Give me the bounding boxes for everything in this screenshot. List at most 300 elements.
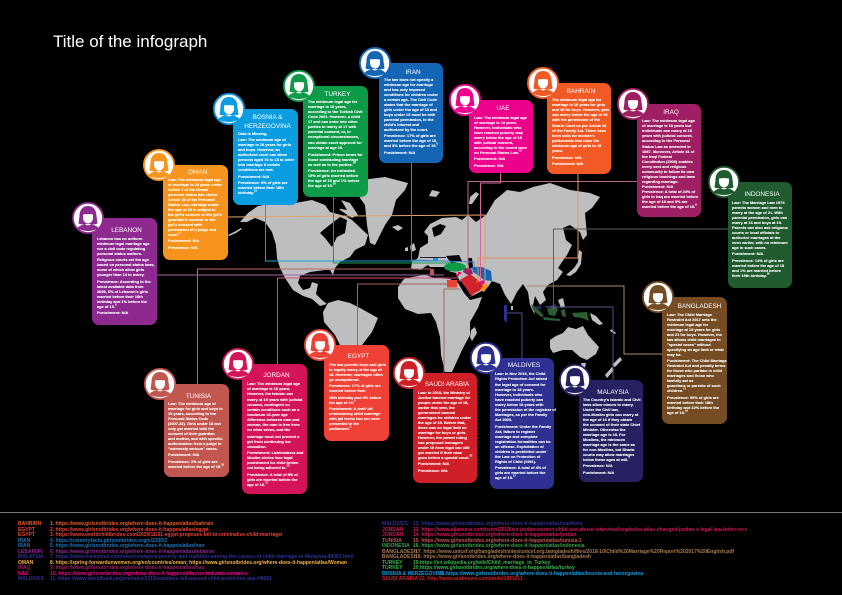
text block: 18 years, according to the bbox=[168, 410, 216, 416]
footnotes: left column: MALDIVES bbox=[18, 576, 44, 582]
text block: birthday and 1% before the bbox=[97, 299, 147, 304]
text block: specifying an age limit or what bbox=[667, 346, 724, 352]
text block: of marriage is 18 years. bbox=[247, 386, 290, 390]
footnotes: left column: BAHRAIN bbox=[18, 521, 41, 527]
text block: Act 2000. bbox=[495, 417, 512, 422]
text block: every sect and religious bbox=[642, 164, 686, 169]
footnotes: right column: 17. https://www.unicef.org/bangladesh/sites/unicef.org.bangladesh/files/2018-10/Child%20Marriage%20Report%202017%20English.pdf bbox=[415, 549, 734, 555]
text block: for those who partake in child bbox=[667, 368, 722, 373]
text block bbox=[474, 114, 527, 168]
text block: latest available data from bbox=[97, 284, 144, 289]
line: Tunisia bbox=[198, 269, 431, 384]
text block: Prevalence: A total of 24% of bbox=[642, 189, 695, 194]
panel: Tunisia bbox=[164, 384, 229, 477]
text block: Punishment: The Child Marriage bbox=[667, 358, 727, 363]
text block: minimum legal age for bbox=[667, 322, 708, 326]
text block: marriage and complete bbox=[495, 434, 538, 439]
text block: married before the age of 18 bbox=[732, 263, 784, 268]
text block: of marriage is 18 years. bbox=[474, 120, 517, 124]
text block: Punishment: N/A bbox=[384, 150, 415, 155]
text block: married before their 18th bbox=[97, 294, 143, 299]
text block: people under the age of 18, bbox=[418, 400, 468, 404]
text block: not being adhered to.13 bbox=[247, 465, 289, 470]
text block: the girl's consent or the girl's bbox=[168, 212, 222, 216]
text block: younger than 14 to marry. bbox=[97, 272, 144, 277]
footnotes: left column: 2. https://www.girlsnotbrides.org/where-does-it-happen/atlas/egypt bbox=[50, 527, 209, 533]
text block: exceptional circumstances, bbox=[308, 134, 359, 138]
text block: 18. However, marriages often bbox=[329, 372, 383, 376]
text block: marriages for children under bbox=[418, 414, 471, 420]
footnotes: left column: IRAN bbox=[18, 538, 30, 544]
text block: criminalizing child marriage bbox=[329, 411, 380, 416]
text block: according to the Turkish Civil bbox=[308, 108, 362, 114]
text block: age of 15.18 bbox=[667, 409, 688, 415]
text block: Act, failure to register bbox=[495, 429, 535, 434]
text block bbox=[384, 76, 438, 155]
text block: However, individuals who bbox=[474, 124, 521, 130]
country: Iran bbox=[472, 267, 492, 281]
text block: Justice banned marriage for bbox=[418, 394, 470, 400]
text block: parties to marry at 17 with bbox=[308, 124, 356, 128]
text block: Personal Status Code bbox=[168, 416, 208, 420]
text block: Law: In 2019, the Ministry of bbox=[418, 390, 470, 394]
text block: Punishment: N/A bbox=[583, 470, 614, 475]
panel: Bosnia and Herzegovina bbox=[233, 109, 298, 205]
text block: marriage to 18 years. bbox=[495, 387, 534, 392]
text block: earlier that year, the bbox=[418, 404, 455, 410]
country: Malaysia bbox=[536, 304, 556, 309]
text block: Punishment: N/A bbox=[168, 452, 199, 457]
text block: marriages and those who bbox=[667, 373, 714, 378]
country: Iraq bbox=[463, 268, 473, 275]
heading: HERZEGOVINA bbox=[244, 123, 291, 130]
text block: Constitution (2005) enables bbox=[642, 159, 693, 164]
text block: based on personal status laws, bbox=[97, 262, 155, 267]
text block: marriage age is the same as bbox=[583, 442, 635, 446]
line: Egypt bbox=[358, 284, 450, 345]
country: Bosnia bbox=[433, 258, 438, 261]
text block: the age of 15. Before that, bbox=[418, 420, 466, 424]
country: UAE bbox=[480, 280, 485, 285]
panel: Jordan bbox=[242, 364, 307, 494]
footnotes: right column: 21.https://www.girlsnotbrides.org/where-does-it-happen/atlas/bosnia-and-herzegovina bbox=[439, 571, 643, 577]
country: Saudi Arabia bbox=[460, 274, 485, 296]
text block: parental consent, or, in bbox=[308, 128, 351, 134]
text block: and 3% before the age of 15.5 bbox=[384, 143, 438, 148]
text block: the consent of their state Chief bbox=[583, 422, 640, 426]
text block: Article 10 of the Personal bbox=[168, 196, 215, 202]
panel: Iraq bbox=[637, 104, 701, 217]
text block: below these ages at will.7 bbox=[583, 456, 630, 462]
footnotes: right column: BOSNIA & HERZEGOVINA bbox=[382, 571, 444, 577]
icon: Iraq avatar bbox=[617, 88, 649, 120]
text block: However, the parent ruling bbox=[418, 434, 467, 440]
heading: LEBANON bbox=[111, 227, 142, 234]
text block: The minimum legal age for bbox=[552, 96, 601, 102]
text block: Prevalence: 4% of girls are bbox=[238, 180, 288, 185]
text block: Punishment: N/A bbox=[732, 251, 763, 256]
icon: Oman avatar bbox=[143, 149, 175, 181]
heading: IRAQ bbox=[663, 109, 679, 116]
text block: maximum 15-year age bbox=[247, 412, 288, 417]
text block: girls are married before the bbox=[247, 477, 297, 482]
text block: girls in Iraq are married before bbox=[642, 194, 698, 199]
text block: some of which allow girls bbox=[97, 267, 144, 272]
heading: BANGLADESH bbox=[678, 303, 721, 310]
text block: Restraint Act 2017 sets the bbox=[667, 316, 717, 322]
footnotes: right column: 14. https://www.girlsnotbrides.org/where-does-it-happen/atlas/jordan bbox=[413, 532, 576, 538]
text block: have reached puberty may bbox=[474, 130, 523, 134]
text block: Marriages, as per the Family bbox=[495, 412, 547, 417]
icon: Iran avatar bbox=[359, 47, 391, 79]
text block: can obtain court approval for bbox=[308, 140, 362, 145]
text block bbox=[583, 396, 641, 475]
text block: Prevalence: 17% of girls are bbox=[329, 383, 381, 388]
text block: Punishment: N/A bbox=[552, 161, 583, 166]
text block: Parents can also ask religious bbox=[732, 224, 788, 230]
text block: only get married with the bbox=[168, 426, 214, 430]
text block: personal status matters. bbox=[97, 250, 142, 256]
text block: authorized by the court. bbox=[384, 126, 428, 132]
text block: Rights Protection Act raised bbox=[495, 376, 547, 380]
heading: JORDAN bbox=[263, 372, 290, 379]
panel: Bangladesh bbox=[662, 297, 727, 424]
text block: an offense. Exploitation of bbox=[495, 444, 544, 449]
icon: Tunisia avatar bbox=[144, 368, 176, 400]
text block: and 21 for boys. However, the bbox=[667, 332, 722, 336]
text block: Status Law, marriage under bbox=[168, 202, 219, 206]
text block bbox=[308, 98, 363, 188]
heading: MALAYSIA bbox=[597, 389, 629, 396]
icon: Jordan avatar bbox=[222, 348, 254, 380]
heading: INDONESIA bbox=[744, 191, 780, 198]
text block: been calls for women's bbox=[552, 133, 595, 138]
text block: difference between man and bbox=[247, 417, 299, 422]
map: highlighted countries bbox=[420, 257, 589, 323]
title: Title of the infograph bbox=[53, 32, 207, 51]
text block: girls under the age of 13 and bbox=[384, 106, 437, 112]
text block: their 15th birthday.16 bbox=[732, 272, 770, 278]
footnotes: left column: 7. https://www.malaymail.com/news/malaysia/poverty-and-tradition-among-the-causes-of-child-marriage-in-Malaysia-48083.html bbox=[50, 554, 354, 560]
icon: UAE avatar bbox=[449, 84, 481, 116]
footnotes: left column: IRAQ bbox=[18, 565, 30, 571]
heading: BOSNIA & bbox=[253, 114, 282, 121]
text block: can marry below the age of 16 bbox=[552, 112, 608, 116]
footnotes: left column: LEBANON bbox=[18, 549, 43, 555]
text block: go unregistered. bbox=[329, 376, 359, 382]
text block: birthday.21 bbox=[238, 190, 257, 195]
text block: child's interest and bbox=[384, 122, 419, 126]
text block: guardians or parents of such bbox=[667, 383, 721, 388]
text block: The Country's Islamic and Civil bbox=[583, 396, 641, 402]
footnotes: right column: 19.https://en.wikipedia.org/wiki/Child_marriage_in_Turkey bbox=[413, 560, 550, 566]
footnotes: left column bbox=[18, 521, 354, 582]
text block: parental permission, in the bbox=[384, 116, 434, 122]
text block: Law: The minimum legal age bbox=[168, 176, 221, 182]
text block: The law permits boys and girls bbox=[329, 362, 386, 366]
heading: TURKEY bbox=[325, 91, 350, 98]
icon: Egypt avatar bbox=[304, 329, 336, 361]
footnotes: right column: BANGLADESH bbox=[382, 554, 417, 560]
footnotes: left column: 3. https://www.worldchildbrides.com/2020/11/31-egypt-proposes-bill-to-criminalize-child-marriage/ bbox=[50, 532, 282, 538]
footnotes: left column: OMAN bbox=[18, 560, 33, 566]
text block: community to follow its own bbox=[642, 169, 694, 174]
country: Oman bbox=[480, 283, 489, 292]
footnotes: right column: MALDIVES bbox=[382, 521, 408, 527]
footnotes: left column: 1. https://www.girlsnotbrides.org/where-does-it-happen/atlas/bahrain bbox=[50, 521, 213, 527]
text block: Punishment: Prison terms for bbox=[308, 152, 363, 157]
text block: Article 7 of the Omani bbox=[168, 186, 208, 192]
text block: non-Muslim girls can marry at bbox=[583, 412, 638, 416]
footnotes: left column: EGYPT bbox=[18, 527, 35, 533]
text block: the age of 18 and 1% before bbox=[308, 178, 359, 183]
text block: parliament.2 bbox=[329, 426, 351, 431]
text block: 15% of girls married before bbox=[308, 173, 358, 178]
text block bbox=[328, 362, 386, 431]
heading: TUNISIA bbox=[186, 393, 211, 400]
text block: personal status law. Under bbox=[168, 192, 217, 196]
text block: Rights of Child (1991). bbox=[495, 459, 536, 464]
text block: Prevalence: N/A bbox=[474, 163, 504, 168]
text block: punishment for child brides bbox=[247, 460, 298, 465]
text block: Punishment: Lawbreakers and bbox=[247, 450, 303, 455]
text block: with jail terms has not been bbox=[329, 416, 380, 421]
text block: have reached puberty can bbox=[495, 397, 543, 402]
text block: lawfully act as bbox=[667, 378, 693, 383]
text block: even earlier, with no minimum bbox=[732, 240, 788, 244]
text block bbox=[495, 370, 556, 480]
text block: there was no legal limit on bbox=[418, 424, 467, 430]
text block bbox=[642, 118, 698, 209]
line: Bangladesh bbox=[527, 286, 662, 354]
panel: Turkey bbox=[303, 86, 368, 197]
text block: court.8 bbox=[168, 231, 180, 236]
text block: authorized court can allow bbox=[238, 152, 287, 157]
text block: may be. bbox=[667, 352, 682, 356]
text block: minimum age for marriage bbox=[384, 82, 433, 86]
footnotes: left column: IRAN bbox=[18, 543, 30, 549]
text block: Prevalence: N/A bbox=[552, 155, 582, 160]
text block: those contracting marriage bbox=[308, 157, 358, 162]
country: Indonesia bbox=[531, 304, 589, 321]
text block: certain conditions such as a bbox=[247, 407, 299, 412]
text block: "extremely serious" cases. bbox=[168, 446, 218, 450]
text block: of marriage is 18 years under bbox=[168, 182, 222, 186]
footnotes: right column: BANGLADESH bbox=[382, 549, 417, 555]
text block: Prevalence: 17% of girls are bbox=[384, 133, 436, 138]
text block: conditions are met. bbox=[238, 167, 274, 172]
footnotes: left column: 4. https://countryfacts.girlsnotbrides.org/c/2330/2 bbox=[50, 538, 167, 544]
text block: consent of their guardian bbox=[168, 430, 215, 436]
footnotes: right column: 15. https://www.girlsnotbrides.org/where-does-it-happen/atlas/tunisia-2 bbox=[413, 538, 582, 544]
panel: Oman bbox=[163, 165, 228, 260]
icon: Turkey avatar bbox=[283, 70, 315, 102]
text block: boys under 15 must be with bbox=[384, 112, 435, 116]
footnotes: right column: 18. https://www.girlsnotbrides.org/where-does-it-happen/atlas/bangladesh bbox=[415, 554, 591, 560]
footnotes: left column: 5. https://www.girlsnotbrides.org/where-does-it-happen/atlas/iran bbox=[50, 543, 205, 549]
text block: parental permission, girls can bbox=[732, 214, 787, 220]
text block: Law: The minimum age of bbox=[168, 400, 216, 406]
text block: Punishment: N/A bbox=[168, 238, 199, 243]
text block: years. bbox=[552, 148, 563, 153]
text block: marry at 16 and boys at 19. bbox=[732, 220, 782, 224]
line: UAE bbox=[480, 173, 500, 280]
text block: courts may allow marriages bbox=[583, 452, 634, 456]
text block: the age of 15.20 bbox=[308, 183, 336, 188]
text block: marriage for boys or girls. bbox=[418, 430, 466, 434]
country: Maldives bbox=[504, 305, 507, 323]
text block: Law: The Child Marriage bbox=[667, 312, 712, 316]
text block: 1987. Moreover, Article 41 of bbox=[642, 149, 694, 154]
footnotes: right column: JORDAN bbox=[382, 527, 403, 533]
icon: Indonesia avatar bbox=[708, 166, 740, 198]
text block: girls are married before the bbox=[495, 470, 545, 475]
text block bbox=[667, 312, 727, 415]
text block: Under the Civil law, bbox=[583, 406, 619, 412]
country: Jordan and Lebanon bbox=[456, 272, 461, 276]
text block: with judicial consent, bbox=[474, 140, 513, 144]
text block: marry at 15 years with judicial bbox=[247, 397, 302, 402]
text block: guardian's consent or the bbox=[168, 216, 215, 222]
icon: Bahrain avatar bbox=[527, 67, 559, 99]
map: seas cut out bbox=[303, 198, 473, 297]
line: Oman bbox=[228, 215, 485, 286]
text block: according to the recent case bbox=[474, 144, 527, 150]
line: Turkey bbox=[334, 197, 450, 263]
text block: Law: In Nov 2019, the Child bbox=[495, 370, 545, 376]
text block: Punishment: N/A bbox=[418, 461, 449, 466]
icon: Lebanon avatar bbox=[72, 202, 104, 234]
footnotes: left column: 8. https://spring-forwardunwomen.org/en/countries/oman; https://www.girlsnotbrides.org/where-does-it-happen/atlas/Woman bbox=[50, 560, 347, 566]
footnotes: right column: 16. https://www.girlsnotbrides.org/where-does-it-happen/atlas/indonesia bbox=[413, 543, 585, 549]
text block: Sharia Court as per Article 18 bbox=[552, 123, 606, 128]
text block: conditions for children under bbox=[384, 92, 438, 96]
text block: marriage age is 18. For bbox=[583, 432, 625, 436]
heading: MALDIVES bbox=[508, 362, 540, 369]
text block: registration formalities can be bbox=[495, 439, 551, 444]
text block: Punishment: N/A bbox=[238, 174, 269, 179]
text block bbox=[418, 390, 472, 473]
footnotes: left column: MALAYSIA bbox=[18, 554, 44, 560]
text block: of the Family Act. There have bbox=[552, 128, 606, 133]
text block: goes before a special court.22 bbox=[418, 454, 472, 460]
line: Lebanon bbox=[157, 274, 444, 276]
icon: Bangladesh avatar bbox=[642, 281, 674, 313]
text block: Punishment: N/A bbox=[474, 156, 505, 161]
text block: and has only imposed bbox=[384, 86, 425, 92]
footnotes: right column: TUNISIA bbox=[382, 538, 402, 544]
text block: age of 15.6 bbox=[97, 303, 116, 309]
text block: Prevalence: N/A bbox=[168, 245, 198, 250]
text block: marry below 18 years with bbox=[495, 402, 543, 407]
text block: marriage at 18 years for girls bbox=[667, 326, 720, 332]
text block: to legally marry at the age of bbox=[329, 366, 382, 372]
line: Maldives bbox=[507, 313, 522, 358]
footnotes: left column: 10. https://www.girlsnotbrides.org/where-does-it-happen/atlas/united-arab-emirates bbox=[50, 571, 248, 577]
text block: the Law on Protection of bbox=[495, 454, 540, 459]
text block: married before the age of 15.9 bbox=[642, 204, 697, 209]
text block: Status Law as amended in bbox=[642, 144, 691, 149]
text block: married before their 18th bbox=[238, 185, 284, 190]
line: Bahrain bbox=[478, 174, 578, 281]
footnotes: right column: SAUDI ARABIA bbox=[382, 576, 418, 582]
line: Malaysia bbox=[545, 307, 613, 380]
text block: The law does not specify a bbox=[384, 76, 433, 82]
text block: government banned bbox=[418, 410, 455, 414]
country: Turkey bbox=[444, 262, 466, 272]
text block: the age of 15.3 bbox=[329, 399, 355, 405]
text block: Muslims, the minimum bbox=[583, 436, 625, 442]
text block: Prevalence: According to the bbox=[97, 279, 151, 284]
text block: Data is Missing. bbox=[238, 130, 267, 136]
footnotes: left column: EGYPT bbox=[18, 532, 35, 538]
panel: Egypt bbox=[324, 345, 389, 441]
text block: Minister. Otherwise the bbox=[583, 426, 626, 432]
text block: a certain age. The Civil Code bbox=[384, 96, 437, 102]
text block: Prevalence: A total of 8% of bbox=[247, 472, 298, 477]
text block: the age of 18 is subject to bbox=[168, 206, 216, 212]
panel: Saudi Arabia bbox=[413, 373, 477, 483]
text block: Law: The minimum legal age bbox=[642, 118, 695, 122]
text block: Prevalence: N/A bbox=[583, 463, 613, 468]
text block: Code 2001. However, a child bbox=[308, 114, 360, 118]
text block: as well as to the parties.19 bbox=[308, 161, 356, 167]
text block: 18th birthday and 2% before bbox=[329, 395, 381, 400]
text block: girl from continuing her bbox=[247, 439, 291, 444]
text block: (2007-32). Girls under 18 can bbox=[168, 420, 221, 426]
line: Saudi Arabia bbox=[444, 289, 460, 373]
text block: get married if their case bbox=[418, 450, 462, 454]
text block: children is prohibited under bbox=[495, 449, 546, 454]
footnotes: left column: 11. https://www.worldbank.org/en/news/2019/maldives-bill-passed-child-protection-law-H8681 bbox=[50, 576, 272, 582]
footnotes: right column: TURKEY bbox=[382, 565, 403, 571]
text block: "special cases" without bbox=[667, 342, 711, 346]
text block: Religious courts set the age bbox=[97, 257, 149, 262]
text block: age of 18.12 bbox=[495, 475, 516, 480]
text block bbox=[732, 200, 788, 278]
text block: with the permission of the bbox=[552, 116, 600, 122]
text block: Prevalence: A total of 4% of bbox=[495, 465, 546, 470]
text block: the Iraqi Federal bbox=[642, 154, 672, 159]
text block: married before their 18th bbox=[667, 400, 713, 405]
text block: nor a civil code regulating bbox=[97, 246, 145, 250]
text block: Prevalence: An estimated bbox=[308, 168, 355, 173]
text block: and mother, and with specific bbox=[168, 436, 222, 440]
text block bbox=[552, 96, 610, 166]
text block: age of 18.14 bbox=[247, 482, 268, 487]
footnotes: right column: INDONESIA bbox=[382, 543, 410, 549]
text block: authorization from a judge in bbox=[168, 440, 221, 446]
text block: the age of 16 if they obtain bbox=[583, 416, 632, 422]
country: Tunisia bbox=[430, 269, 434, 275]
text block: age in such cases. bbox=[732, 244, 766, 250]
text block: Prevalence: 14% of girls are bbox=[732, 258, 784, 263]
text block: laws allow minors to marry. bbox=[583, 402, 634, 406]
footnotes: right column: JORDAN bbox=[382, 532, 403, 538]
panel: Bahrain bbox=[547, 83, 611, 174]
footnotes: right column: TURKEY bbox=[382, 560, 403, 566]
text block: marriage is 16 years for girls bbox=[552, 102, 605, 106]
footnotes: right column bbox=[382, 521, 747, 582]
text block: Prevalence: 59% of girls are bbox=[667, 395, 719, 400]
text block: for non-Muslims, but Sharia bbox=[583, 446, 634, 452]
text block: children.17 bbox=[667, 388, 686, 393]
text block: persons aged 16 to 18 to enter bbox=[238, 157, 294, 162]
text block: regarding marriage. bbox=[642, 179, 679, 184]
text block: and boys. However, an bbox=[238, 147, 280, 152]
text block: Punishment: N/A bbox=[97, 310, 128, 315]
heading: UAE bbox=[496, 105, 510, 112]
